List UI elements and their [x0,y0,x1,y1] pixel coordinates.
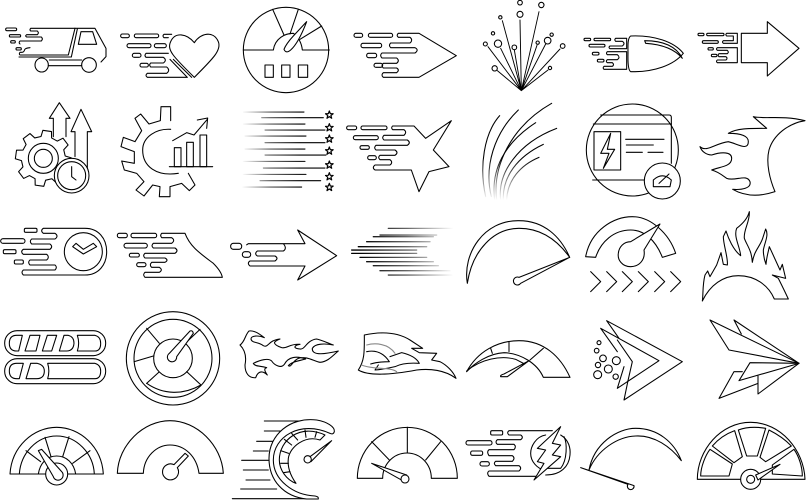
icon: double chevron with bubbles [594,321,682,400]
icon: round dial gauge [126,312,220,405]
icon: flame silhouette [700,117,805,195]
icon: star with speed lines [347,121,451,192]
icons: rows four and five, left half [5,312,457,499]
icon: circular gauge with three boxes [243,7,329,93]
icon: horizontal flames [240,331,338,378]
icons: rows four and five, right half [466,320,805,490]
icon: swoosh with speed lines [117,233,222,277]
icon: pentagon arrow with speed lines [354,33,456,77]
icon: block arrow with speed lines [698,22,799,76]
icon: flaming arch [702,212,788,301]
icon: arched gauge with crescent [467,341,570,377]
icon: heart with speed lines [121,34,219,77]
icon: horizontal fading speed lines [352,228,454,275]
icon: delivery truck [6,28,106,72]
icon: arc gauge with chevrons [586,217,681,292]
icons: row three, right half [467,217,681,292]
icons: row three, left half [1,228,454,280]
icon: crescent gauge with thin needle [467,221,570,285]
icon: speed level bars [5,331,106,384]
icon: paper plane arrow [710,320,799,398]
icon: fading curved lines [483,103,557,200]
icons: rows one and two, left half [6,7,456,197]
icon: long arrow with speed lines [231,230,337,280]
icon: crescent gauge with long needle [581,428,681,490]
icon: dome gauge with panels [697,422,805,489]
icon: open gear with bar chart [121,107,213,197]
icon: speed lines with stars [240,111,333,191]
icon: speedometer with speed lines [232,420,334,499]
icon: three-segment gauge with needle [357,427,457,483]
icon: fireworks burst [483,0,565,91]
icon: winged flame [358,333,456,378]
icon: lightning bolt with speed lines [466,427,570,480]
icon: bullet with speed lines [584,36,683,72]
icon: gear with up arrows and clock [12,103,92,193]
icon: clock with speed lines [1,228,107,275]
icon: browser window with lightning bolt and gauge [586,104,680,199]
icon: segmented half gauge with hub [10,427,103,485]
icon: thick arc gauge [117,421,223,480]
icons: rows one and two, right half [483,0,799,200]
